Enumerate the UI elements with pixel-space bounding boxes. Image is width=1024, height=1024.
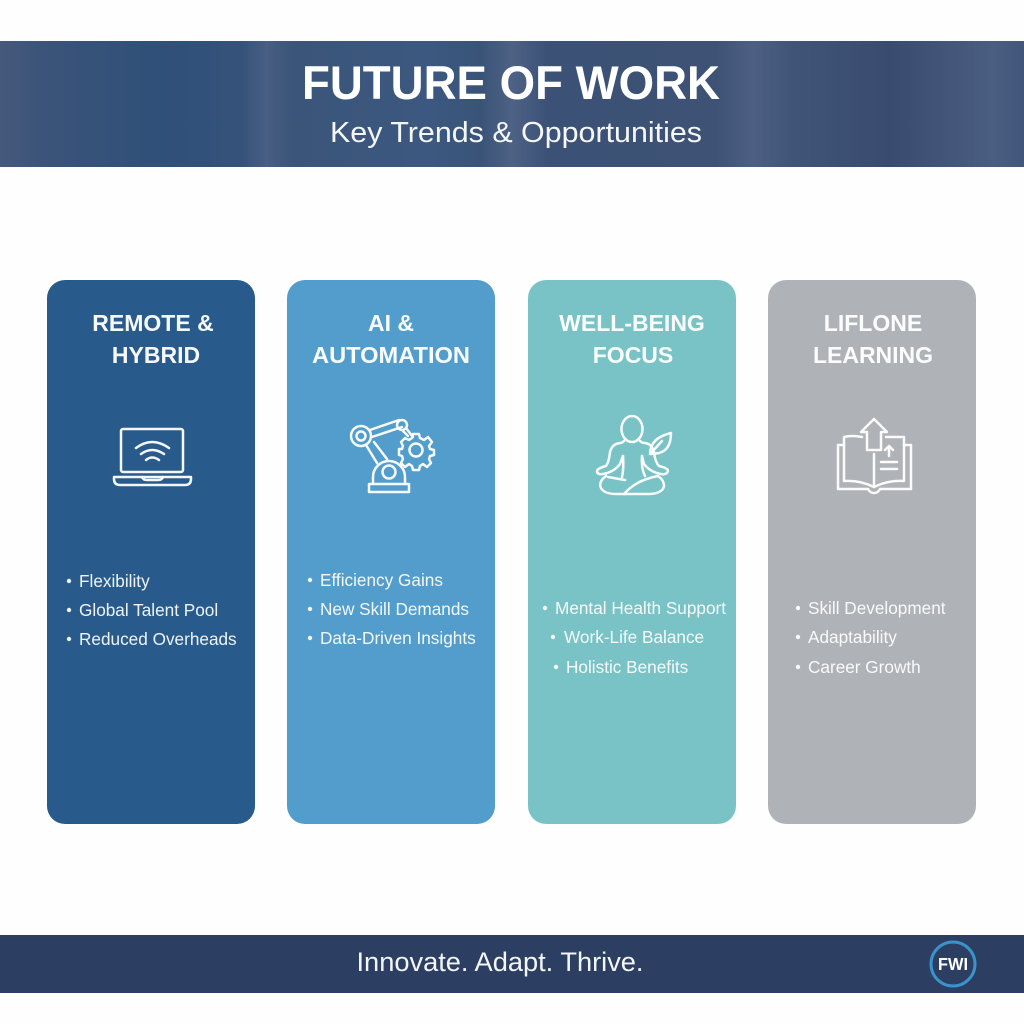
bullet list: lifelong learning: Career Growth [808,657,921,677]
panel: lifelong learning [768,280,976,824]
bullet list: lifelong learning [796,598,946,677]
heading: lifelong learning: LEARNING [813,342,933,368]
logo: FWI badge [931,942,975,986]
icon: meditating figure with leaf [597,416,671,494]
header banner [0,41,1024,167]
bullet list: remote and hybrid: Reduced Overheads [79,629,237,649]
panel: AI and automation [287,280,495,824]
heading: AI and automation: AUTOMATION [312,342,470,368]
heading: remote and hybrid: HYBRID [112,342,200,368]
bullet list: AI and automation: New Skill Demands [320,599,469,619]
bullet list: lifelong learning: Skill Development [808,598,946,618]
icon: robot arm with gear [351,420,434,492]
heading: remote and hybrid: REMOTE & [92,310,214,336]
bullet list: remote and hybrid: Flexibility [79,571,150,591]
heading: AI and automation: AI & [368,310,414,336]
icon: laptop with wifi [114,429,191,485]
subtitle: Key Trends & Opportunities [330,117,702,149]
bullet list: well-being focus: Holistic Benefits [566,657,688,677]
bullet list: well-being focus [543,598,726,677]
bullet list: AI and automation: Data-Driven Insights [320,628,476,648]
heading: lifelong learning: LIFLONE [824,310,922,336]
logo: FWI badge: FWI [938,954,968,974]
bullet list: remote and hybrid [67,571,237,649]
bullet list: well-being focus: Mental Health Support [555,598,726,618]
bullet list: AI and automation [308,570,476,648]
panel: well-being focus [528,280,736,824]
bullet list: well-being focus: Work-Life Balance [564,627,704,647]
bullet list: remote and hybrid: Global Talent Pool [79,600,218,620]
icon: open book with arrow [838,419,911,493]
heading: well-being focus: FOCUS [593,342,673,368]
tagline: Innovate. Adapt. Thrive. [356,947,644,977]
heading: well-being focus: WELL-BEING [559,310,705,336]
bullet list: lifelong learning: Adaptability [808,627,897,647]
panel: remote and hybrid [47,280,255,824]
footer banner [0,935,1024,993]
bullet list: AI and automation: Efficiency Gains [320,570,443,590]
title: FUTURE OF WORK [302,57,720,110]
